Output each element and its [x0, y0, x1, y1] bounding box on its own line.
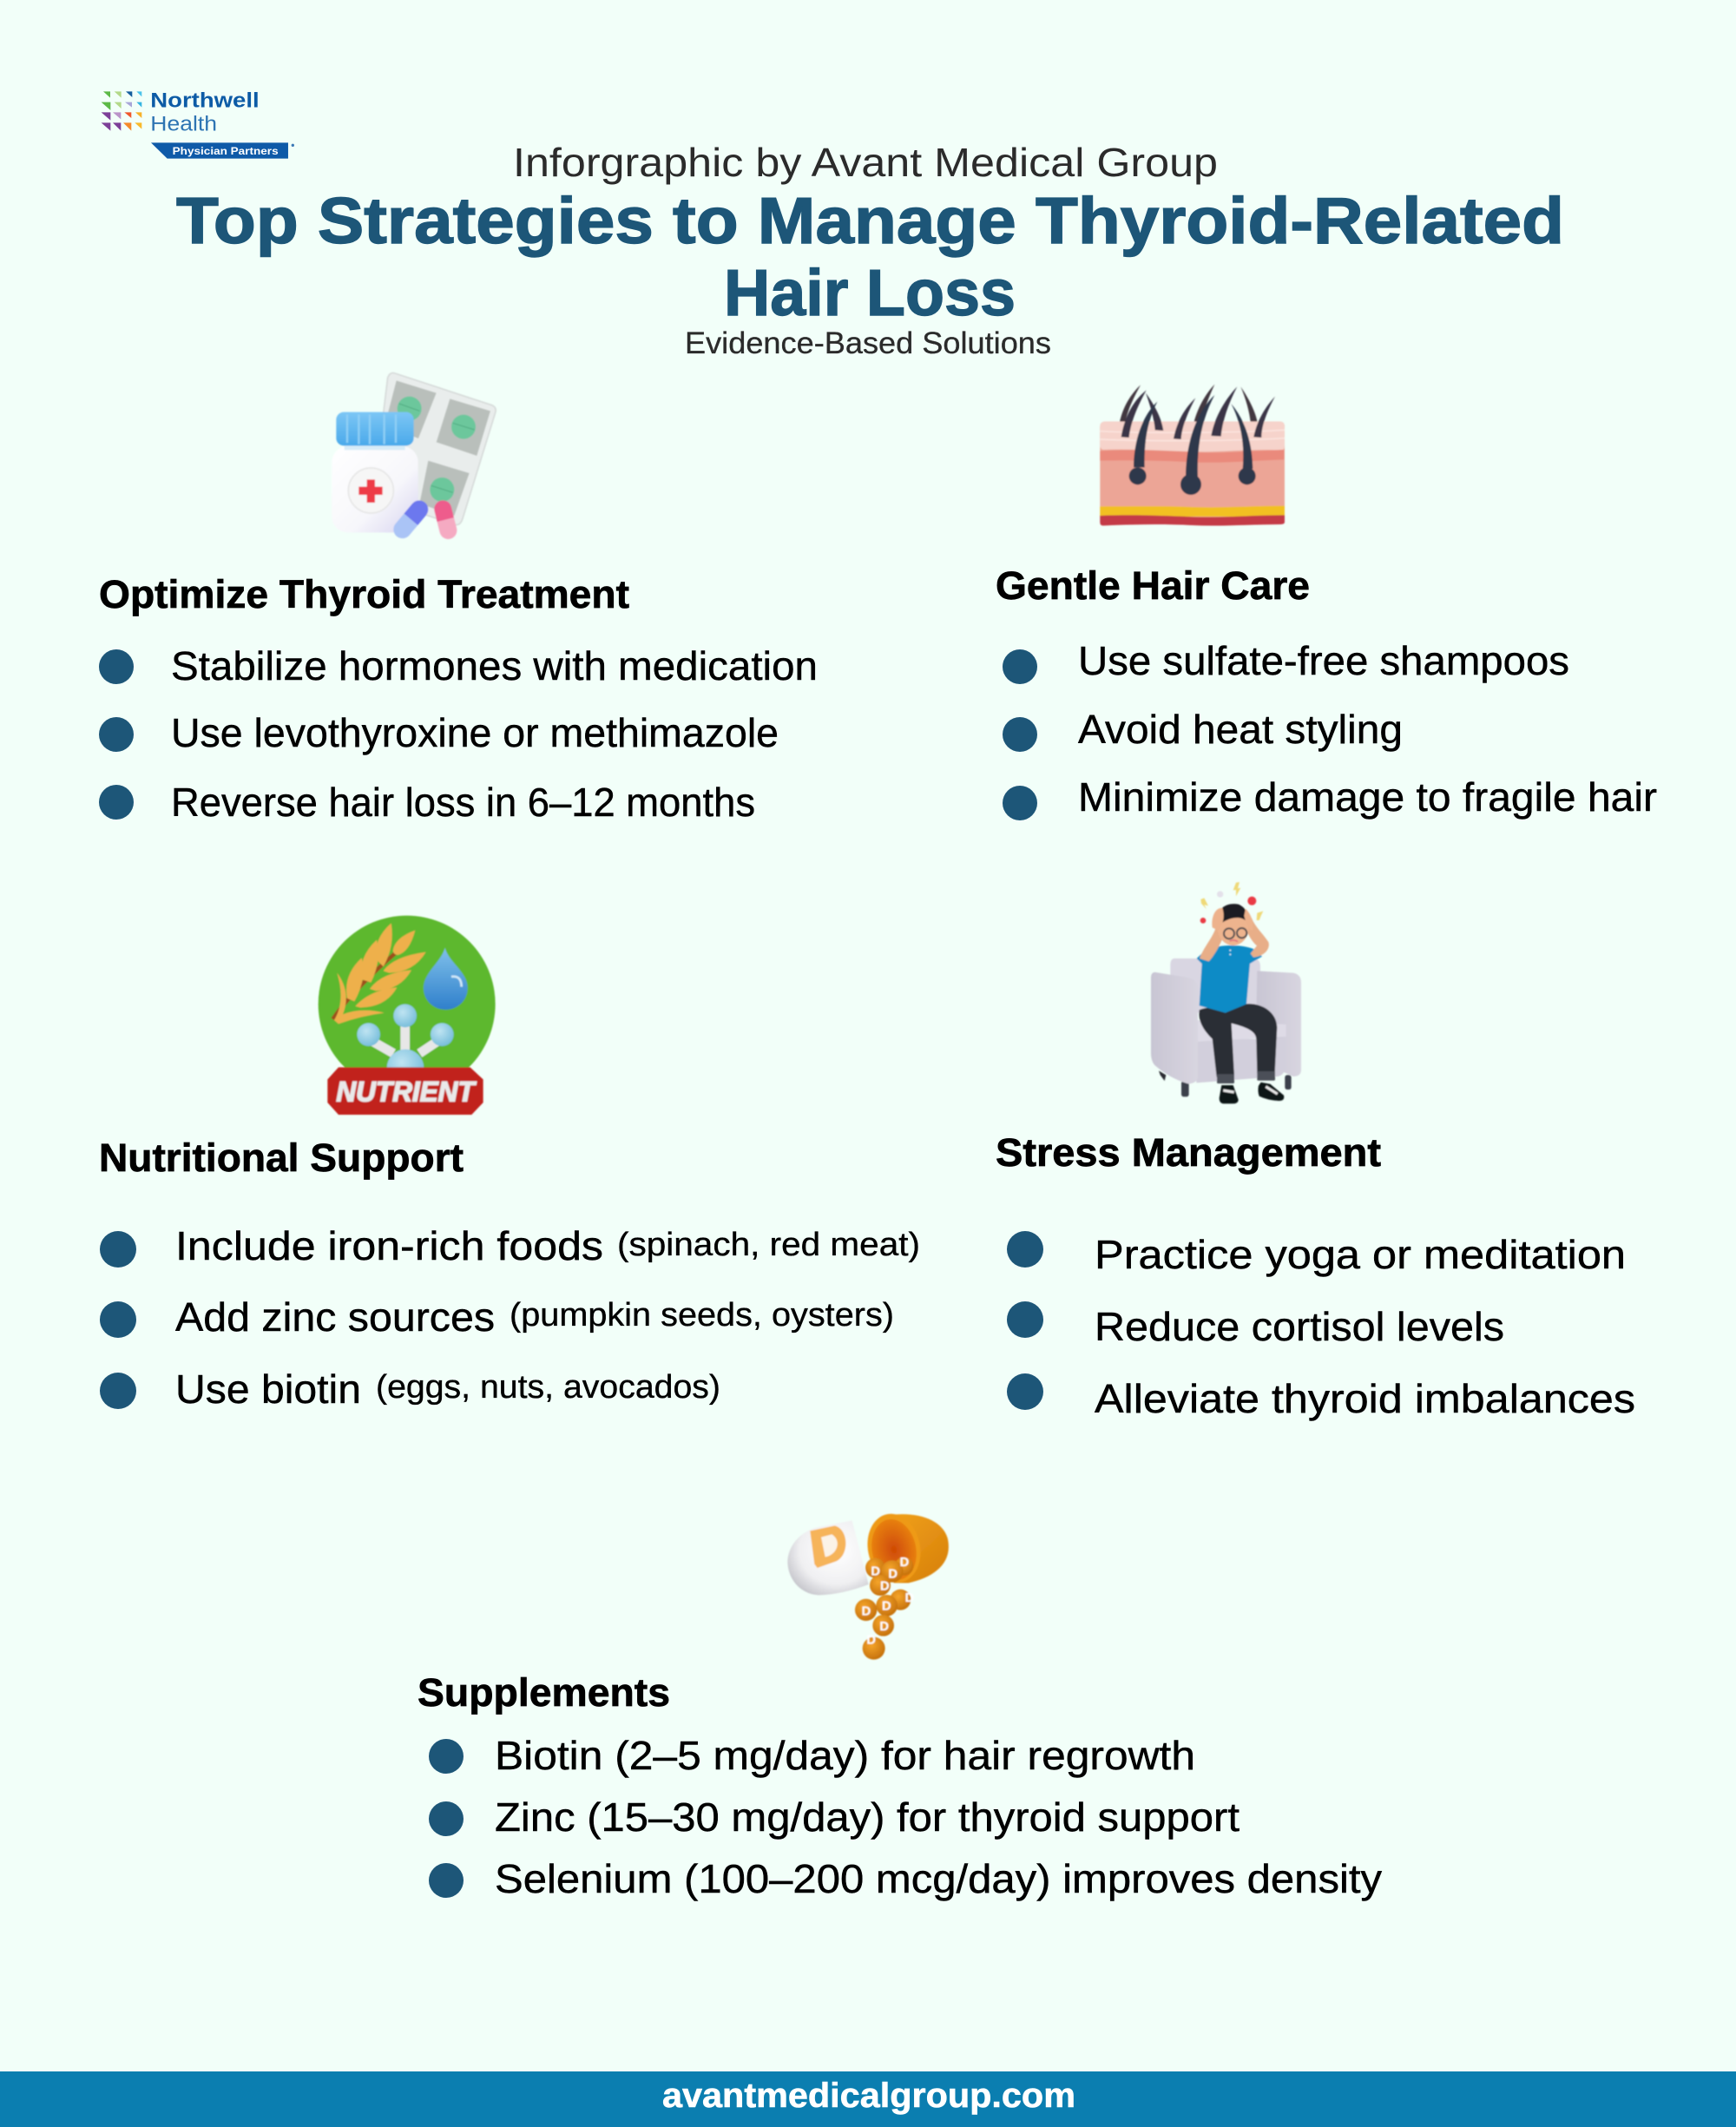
subtitle: Evidence-Based Solutions: [685, 326, 1051, 360]
bullet list: [99, 643, 818, 825]
icon: vitamin D capsule: D: [879, 1620, 889, 1634]
icon: vitamin D capsule: D: [900, 1556, 909, 1570]
bullet list: [429, 1733, 1382, 1901]
bullet list: [100, 1223, 920, 1412]
bullet list: Selenium (100–200 mcg/day) improves density: [495, 1856, 1382, 1901]
bullet list: Avoid heat styling: [1078, 707, 1403, 752]
title: [176, 184, 1564, 329]
bullet list: [1007, 1231, 1635, 1421]
icon: nutrient badge: [319, 916, 496, 1115]
logo: Northwell Health Physician Partners: Health: [150, 113, 217, 136]
icon: medicine bottle and blister pack: [332, 373, 496, 542]
icon: vitamin D capsule: D: [888, 1567, 898, 1581]
title: Hair Loss: [724, 256, 1016, 329]
bullet list: (eggs, nuts, avocados): [376, 1369, 720, 1406]
icon: stressed man in armchair: [1151, 882, 1301, 1103]
footer bar: [0, 2071, 1736, 2127]
icon: vitamin D capsule: D: [905, 1591, 914, 1605]
footer website: avantmedicalgroup.com: [662, 2077, 1075, 2115]
logo: Northwell Health Physician Partners: Northwell: [150, 89, 260, 112]
panel: gentle hair care: [996, 385, 1657, 820]
heading: Supplements: [418, 1670, 670, 1715]
bullet list: Use levothyroxine or methimazole: [171, 710, 779, 755]
icon: skin cross-section with hair follicles: [1100, 385, 1285, 527]
bullet list: Use biotin: [175, 1366, 361, 1412]
bullet list: Biotin (2–5 mg/day) for hair regrowth: [495, 1733, 1195, 1778]
title: Top Strategies to Manage Thyroid-Related: [176, 184, 1564, 257]
bullet list: Reduce cortisol levels: [1095, 1304, 1504, 1349]
header text block: [176, 140, 1564, 360]
bullet list: Add zinc sources: [175, 1294, 495, 1340]
icon: vitamin D capsule: [787, 1509, 949, 1660]
icon: vitamin D capsule: D: [866, 1633, 876, 1647]
panel: optimize thyroid treatment: [99, 373, 818, 825]
logo: Northwell Health Physician Partners: Physician Partners: [173, 145, 279, 157]
bullet list: Alleviate thyroid imbalances: [1095, 1376, 1635, 1421]
heading: Nutritional Support: [99, 1136, 464, 1180]
bullet list: Stabilize hormones with medication: [171, 643, 818, 688]
panel: stress management: [996, 882, 1635, 1421]
panel: supplements: [418, 1509, 1382, 1901]
icon: vitamin D capsule: D: [871, 1565, 880, 1579]
bullet list: Practice yoga or meditation: [1095, 1232, 1626, 1277]
bullet list: Use sulfate-free shampoos: [1078, 638, 1569, 683]
bullet list: [1003, 638, 1657, 820]
icon: vitamin D capsule: D: [882, 1600, 891, 1614]
heading: Stress Management: [996, 1130, 1381, 1175]
icon: vitamin D capsule: D: [862, 1605, 871, 1619]
icon: nutrient badge: NUTRIENT: [336, 1077, 477, 1108]
panel: nutritional support: [99, 916, 920, 1412]
bullet list: Minimize damage to fragile hair: [1078, 774, 1657, 820]
heading: Gentle Hair Care: [996, 563, 1310, 608]
heading: Optimize Thyroid Treatment: [99, 572, 629, 616]
bullet list: (spinach, red meat): [617, 1227, 920, 1263]
bullet list: Include iron-rich foods: [175, 1223, 603, 1268]
bullet list: (pumpkin seeds, oysters): [510, 1297, 894, 1333]
logo: Northwell Health Physician Partners: [102, 89, 294, 159]
bullet list: Reverse hair loss in 6–12 months: [171, 780, 755, 825]
bullet list: Zinc (15–30 mg/day) for thyroid support: [495, 1794, 1240, 1840]
supertitle: Inforgraphic by Avant Medical Group: [513, 140, 1218, 185]
icon: vitamin D capsule: D: [880, 1580, 890, 1594]
